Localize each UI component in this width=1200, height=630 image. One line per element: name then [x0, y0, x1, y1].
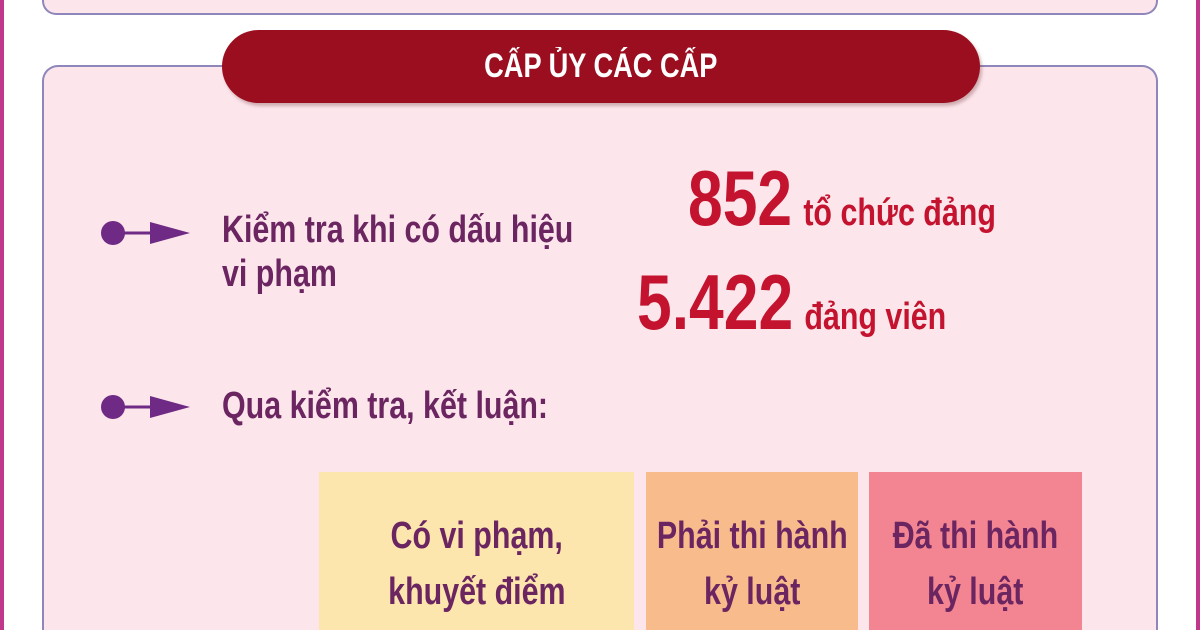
- side stripe right: [1196, 0, 1200, 630]
- icon: bullet arrow 1: [101, 221, 190, 245]
- text: kiem tra khi co dau hieu: Kiểm tra khi có dấu hiệu: [222, 209, 573, 251]
- box: co vi pham: Có vi phạm,: [390, 515, 563, 557]
- header pill: [222, 30, 980, 103]
- stat: 852 to chuc dang: 852 tổ chức đảng: [688, 154, 996, 242]
- side stripe left: [0, 0, 4, 630]
- box: da thi hanh: [869, 472, 1082, 630]
- header pill: CẤP ỦY CÁC CẤP: [484, 47, 718, 85]
- stat: 5.422 dang vien: 5.422 đảng viên: [637, 258, 946, 346]
- box: da thi hanh: kỷ luật: [927, 571, 1024, 613]
- text: kiem tra khi co dau hieu: [222, 209, 573, 295]
- box: co vi pham: khuyết điểm: [388, 571, 565, 613]
- box: phai thi hanh: [646, 472, 858, 630]
- top panel (previous section bottom): [42, 0, 1158, 15]
- text: kiem tra khi co dau hieu: vi phạm: [222, 253, 337, 295]
- box: co vi pham: [319, 472, 634, 630]
- text: qua kiem tra ket luan: Qua kiểm tra, kết luận:: [222, 385, 548, 427]
- box: phai thi hanh: Phải thi hành: [657, 515, 847, 557]
- box: da thi hanh: Đã thi hành: [893, 515, 1058, 557]
- icon: bullet arrow 2: [101, 395, 190, 419]
- box: phai thi hanh: kỷ luật: [704, 571, 800, 613]
